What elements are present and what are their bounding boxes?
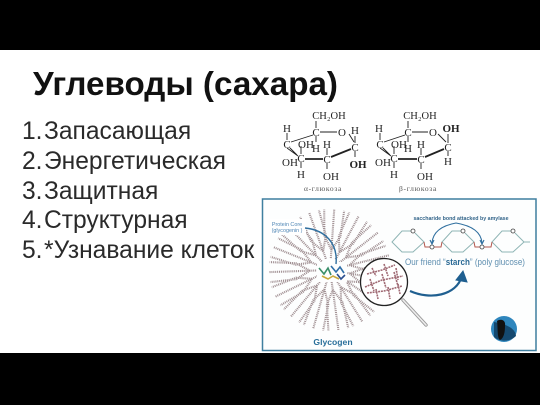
protein core label (270, 219, 306, 235)
list item 2: Энергетическая (44, 148, 226, 175)
alpha-glucose structure: OH (282, 157, 298, 169)
alpha-glucose structure: H (351, 125, 359, 137)
list item 5: 5. (22, 237, 43, 264)
alpha-glucose structure: O (338, 127, 346, 139)
alpha-glucose structure: H (312, 143, 320, 155)
alpha-glucose structure (282, 111, 367, 193)
beta-glucose structure: H (390, 169, 398, 181)
list item 4: Структурная (44, 207, 188, 234)
alpha-glucose structure: C (312, 127, 320, 139)
starch caption: Our friend “starch” (poly glucose) (405, 257, 525, 267)
beta-glucose structure: OH (375, 157, 391, 169)
list item 5: *Узнавание клеток (44, 237, 254, 264)
numbered list: functions of carbohydrates (22, 118, 254, 264)
alpha-glucose structure: C (283, 139, 291, 151)
beta-glucose structure: OH (442, 123, 460, 135)
magnifying glass (360, 258, 426, 325)
protein core (317, 262, 347, 282)
alpha-glucose structure: α-глюкоза (304, 184, 342, 193)
list item 1: 1. (22, 118, 43, 145)
beta-glucose structure: OH (417, 171, 433, 183)
alpha-glucose structure: CH₂OH (312, 111, 346, 122)
beta-glucose structure: C (417, 154, 425, 166)
alpha-glucose structure: OH (349, 159, 367, 171)
glycogen label: Glycogen (313, 337, 353, 347)
amylase caption: saccharide bond attacked by amylase (413, 216, 509, 222)
beta-glucose structure: H (375, 123, 383, 135)
beta-glucose structure: C (404, 127, 412, 139)
list item 3: 3. (22, 178, 43, 205)
alpha-glucose structure: H (283, 123, 291, 135)
list item 2: 2. (22, 148, 43, 175)
beta-glucose structure: C (444, 142, 452, 154)
starch chain (392, 229, 530, 252)
beta-glucose structure: O (429, 127, 437, 139)
top black band (0, 0, 540, 50)
beta-glucose structure: H (417, 139, 425, 151)
glycogen branched molecule (269, 208, 392, 332)
alpha-glucose structure: C (323, 154, 331, 166)
alpha-glucose structure: C (297, 153, 305, 165)
beta-glucose structure: H (444, 156, 452, 168)
arrow to protein core (305, 228, 336, 264)
penguin badge (491, 316, 517, 342)
alpha-glucose structure: H (323, 139, 331, 151)
beta-glucose structure: H (404, 143, 412, 155)
protein core label: Protein Core (272, 222, 302, 228)
alpha-glucose structure: OH (323, 171, 339, 183)
beta-glucose structure (375, 111, 460, 193)
amylase bond arrows (430, 223, 484, 244)
list item 4: 4. (22, 207, 43, 234)
bottom black band (0, 353, 540, 405)
beta-glucose structure: C (376, 139, 384, 151)
alpha-glucose structure: C (351, 142, 359, 154)
beta-glucose structure: β-глюкоза (399, 184, 437, 193)
list item 3: Защитная (44, 178, 158, 205)
beta-glucose structure: OH (391, 139, 407, 151)
curved arrow from magnifier to starch (410, 271, 467, 296)
beta-glucose structure: CH₂OH (403, 111, 437, 122)
list item 1: Запасающая (44, 118, 191, 145)
alpha-glucose structure: OH (298, 139, 314, 151)
title: Углеводы (сахара) (33, 66, 338, 103)
protein core label: (glycogenin ) (272, 228, 303, 234)
beta-glucose structure: C (390, 153, 398, 165)
panel: glycogen and starch illustration (262, 199, 536, 350)
panel frame (262, 199, 536, 350)
alpha-glucose structure: H (297, 169, 305, 181)
